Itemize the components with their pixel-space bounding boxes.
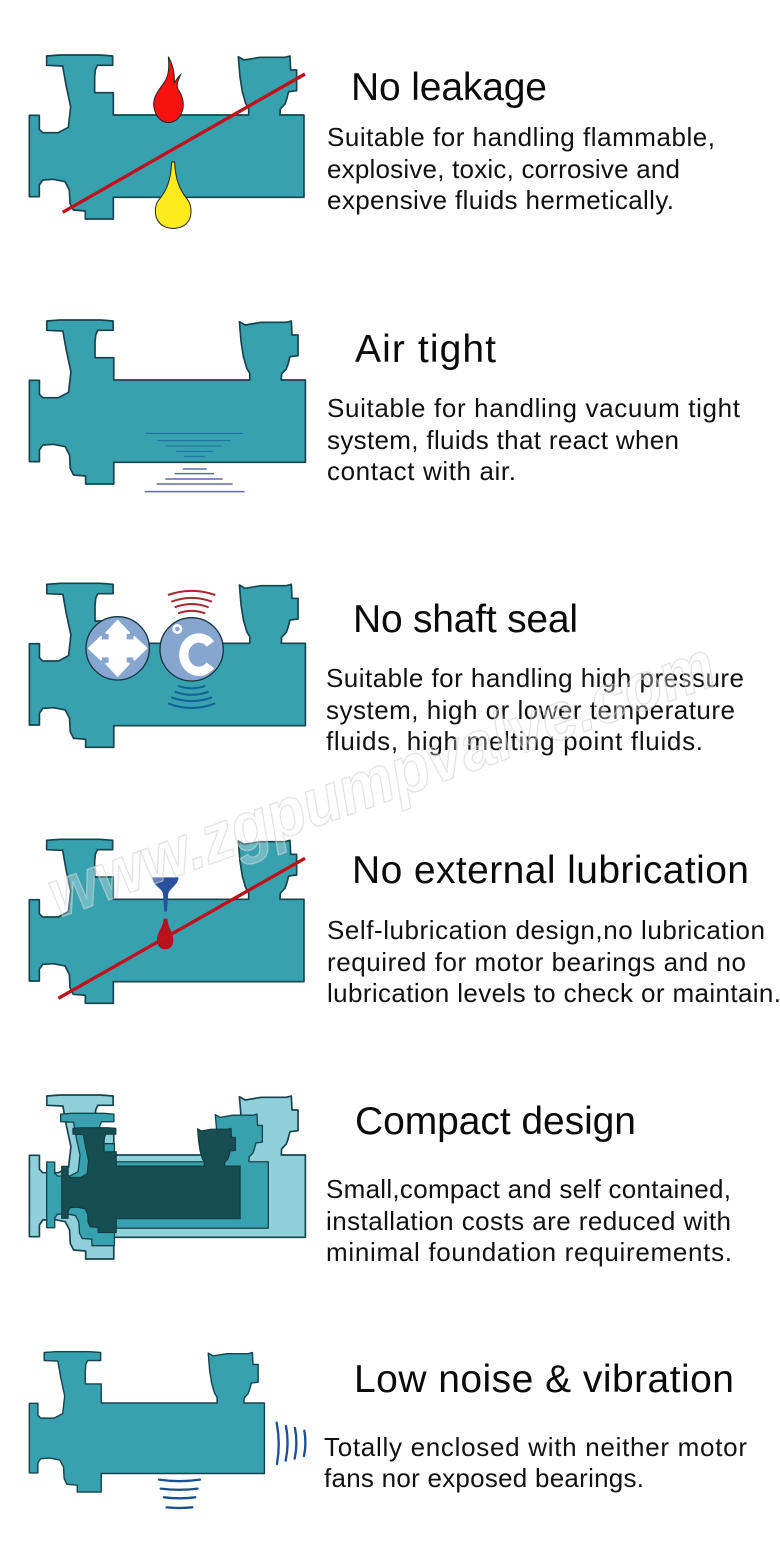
icon: pump with oil funnel crossed out — [29, 839, 305, 1003]
icon: pump with flame and drop crossed out — [29, 55, 305, 228]
panel: no shaft seal — [29, 583, 744, 756]
panel: no leakage — [29, 55, 715, 228]
icon: pump with pressure and temperature circles — [29, 583, 305, 747]
description: minimal foundation requirements. — [326, 1237, 732, 1267]
description: expensive fluids hermetically. — [327, 185, 674, 215]
title: No shaft seal — [353, 598, 578, 641]
icon: temperature circle — [160, 618, 223, 681]
icon: heat waves — [168, 591, 215, 613]
description: Suitable for handling flammable, — [327, 122, 715, 152]
title: Low noise & vibration — [354, 1358, 734, 1401]
title: No external lubrication — [352, 849, 749, 892]
title: Air tight — [355, 328, 496, 371]
description — [326, 663, 744, 756]
panel: no external lubrication — [29, 839, 780, 1008]
description — [327, 915, 780, 1008]
description: Suitable for handling vacuum tight — [327, 393, 741, 423]
description — [327, 393, 741, 486]
description — [326, 1174, 732, 1267]
description: fluids, high melting point fluids. — [326, 726, 703, 756]
description: installation costs are reduced with — [326, 1206, 731, 1236]
panel: compact design — [29, 1095, 732, 1267]
description: Self-lubrication design,no lubrication — [327, 915, 765, 945]
description: explosive, toxic, corrosive and — [327, 154, 680, 184]
icon: pump with vacuum lines — [29, 320, 305, 492]
description — [324, 1432, 747, 1493]
description — [327, 122, 715, 215]
title: No leakage — [351, 66, 547, 109]
description: Small,compact and self contained, — [326, 1174, 731, 1204]
description: Suitable for handling high pressure — [326, 663, 744, 693]
panel: low noise and vibration — [29, 1352, 747, 1508]
description: Totally enclosed with neither motor — [324, 1432, 747, 1462]
description: contact with air. — [327, 456, 516, 486]
description: required for motor bearings and no — [327, 947, 746, 977]
description: system, high or lower temperature — [326, 695, 735, 725]
icon: pressure circle — [86, 617, 149, 680]
description: system, fluids that react when — [327, 425, 679, 455]
title: Compact design — [355, 1100, 636, 1143]
panel: air tight — [29, 320, 741, 492]
icon: three nested pump sizes — [29, 1095, 305, 1259]
watermark: www.zgpumpvalve.com — [38, 626, 725, 932]
description: fans nor exposed bearings. — [324, 1463, 644, 1493]
description: lubrication levels to check or maintain. — [327, 978, 780, 1008]
icon: small pump with vibration arcs — [29, 1352, 305, 1508]
icon: cold waves — [168, 686, 215, 708]
